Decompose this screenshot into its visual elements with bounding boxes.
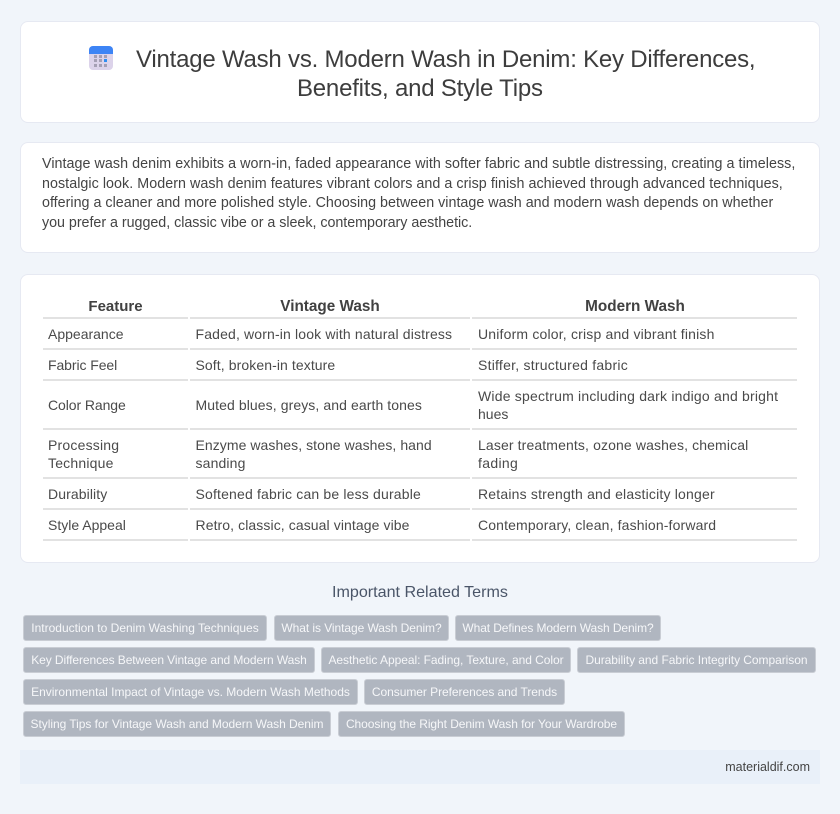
row: fabric feel: Stiffer, structured fabric [478,357,628,373]
chip [23,647,315,673]
row: processing technique: sanding [196,455,246,471]
text block: introduction: nostalgic look. Modern wash denim features vibrant colors and a crisp finish achieved through advanced techniques, [42,176,783,192]
row: fabric feel [48,357,628,373]
chip: Styling Tips for Vintage Wash and Modern Wash Denim [30,717,324,731]
chip [455,615,661,641]
row: style appeal [48,517,716,533]
chip [274,615,449,641]
title: Benefits, and Style Tips [297,75,543,102]
row: durability: Durability [48,486,107,502]
text block: introduction: offering a cleaner and more polished style. Choosing between vintage wash and modern wash depends on whether [42,195,773,211]
chip: Introduction to Denim Washing Techniques [31,621,259,635]
row: color range: hues [478,406,508,422]
row: processing technique: Processing [48,437,119,453]
chip: Durability and Fabric Integrity Comparison [586,653,808,667]
row: color range [48,388,778,422]
text block: introduction: you prefer a rugged, classic vibe or a sleek, contemporary aesthetic. [42,214,472,230]
chip [338,711,625,737]
chip: Aesthetic Appeal: Fading, Texture, and Color [328,653,564,667]
title [136,46,755,102]
chip: Key Differences Between Vintage and Modern Wash [31,653,307,667]
row: processing technique: Technique [48,455,114,471]
title: Vintage Wash vs. Modern Wash in Denim: Key Differences, [136,46,755,73]
row: processing technique: Enzyme washes, stone washes, hand [196,437,432,453]
row: style appeal: Style Appeal [48,517,126,533]
row: fabric feel: Fabric Feel [48,357,117,373]
icon: calendar [89,46,113,70]
footer text: source: materialdif.com [725,760,810,774]
row: processing technique: fading [478,455,518,471]
chip: Consumer Preferences and Trends [372,685,557,699]
row: durability [48,486,715,502]
row: color range: Muted blues, greys, and earth tones [196,397,422,413]
row: appearance: Faded, worn-in look with natural distress [196,326,452,342]
chip: Environmental Impact of Vintage vs. Modern Wash Methods [31,685,350,699]
chip [23,711,331,737]
row: fabric feel: Soft, broken-in texture [196,357,335,373]
footer bar [20,750,820,784]
row: color range: Wide spectrum including dark indigo and bright [478,388,778,404]
table header: modern wash: Modern Wash [585,298,685,315]
row: processing technique [48,437,748,471]
chip: What is Vintage Wash Denim? [281,621,442,635]
chip [321,647,571,673]
heading: important related terms: Important Related Terms [332,583,508,601]
row: appearance: Uniform color, crisp and vibrant finish [478,326,715,342]
chip: Choosing the Right Denim Wash for Your Wardrobe [346,717,617,731]
table header: vintage wash: Vintage Wash [280,298,380,315]
panel: header [20,21,820,123]
row: style appeal: Contemporary, clean, fashion-forward [478,517,716,533]
row: appearance: Appearance [48,326,124,342]
text block: introduction: Vintage wash denim exhibits a worn-in, faded appearance with softer fabric and subtle distressing, creating a timeless, [42,156,795,172]
chip [577,647,816,673]
chip: What Defines Modern Wash Denim? [462,621,654,635]
table header: feature: Feature [88,298,143,315]
row: processing technique: Laser treatments, ozone washes, chemical [478,437,748,453]
row: durability: Retains strength and elasticity longer [478,486,715,502]
row: color range: Color Range [48,397,126,413]
row: durability: Softened fabric can be less durable [196,486,421,502]
chip [364,679,565,705]
related term chips [23,615,816,737]
row: appearance [48,326,715,342]
panel: comparison table [20,274,820,563]
row: style appeal: Retro, classic, casual vintage vibe [196,517,410,533]
panel: introduction [20,142,820,253]
chip [23,615,267,641]
text block: introduction [42,156,795,230]
chip [23,679,358,705]
